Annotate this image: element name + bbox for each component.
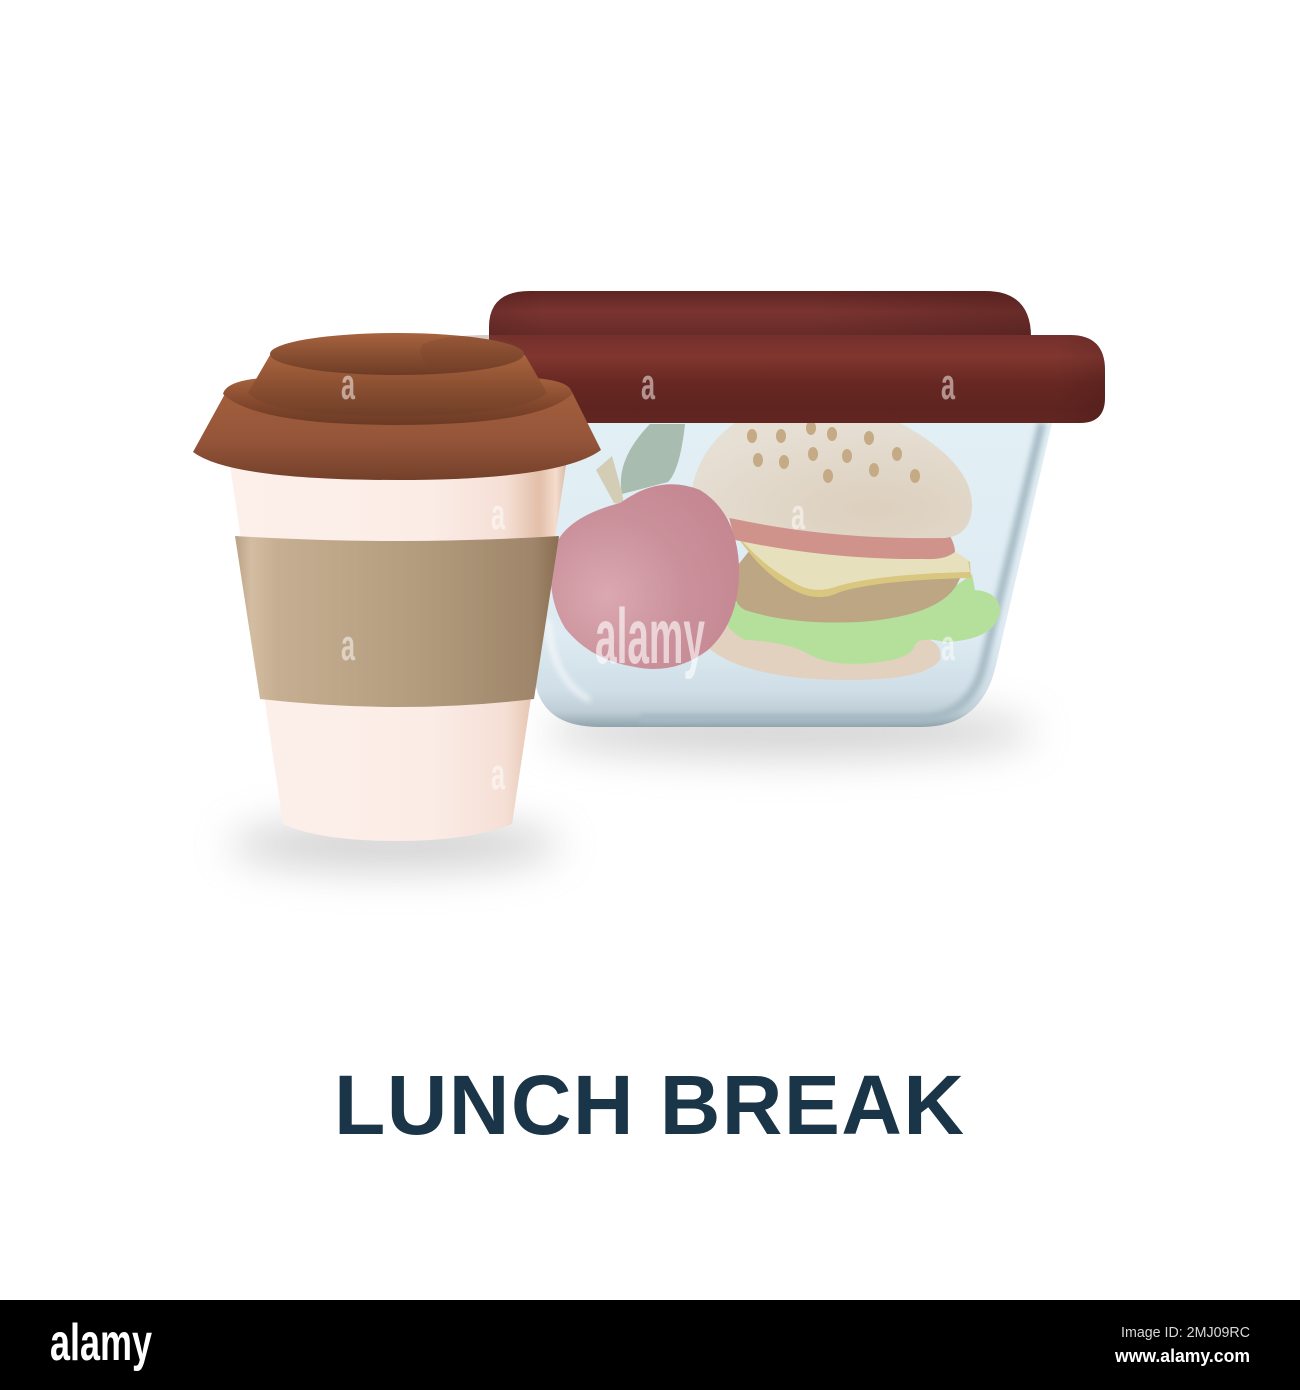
watermarks: a <box>491 750 505 799</box>
image id: Image ID: 2MJ09RC <box>1121 1324 1250 1341</box>
infographic canvas <box>0 291 1300 1390</box>
watermarks: a <box>941 360 955 409</box>
apple leaf <box>621 424 685 494</box>
cup sleeve <box>235 536 559 707</box>
watermarks: a <box>941 621 955 670</box>
watermarks: a <box>491 490 505 539</box>
website: www.alamy.com <box>1114 1346 1250 1366</box>
watermarks: a <box>791 490 805 539</box>
watermarks: alamy <box>595 592 705 680</box>
watermarks: a <box>641 360 655 409</box>
glass container <box>510 423 1052 727</box>
lid brim <box>193 392 601 480</box>
lid top ellipse <box>270 333 524 375</box>
cup body <box>230 465 566 841</box>
patty <box>733 550 961 622</box>
lid second ring <box>223 378 572 425</box>
title: LUNCH BREAK <box>334 1058 964 1152</box>
sandwich <box>690 421 1000 680</box>
lettuce <box>723 574 1000 664</box>
footer logo: alamy <box>50 1314 152 1372</box>
lid lower tier <box>489 335 1105 423</box>
cup shadow <box>230 819 560 871</box>
top bun <box>690 423 972 538</box>
apple stem <box>596 456 624 505</box>
lid middle tier <box>248 355 547 416</box>
box shadow <box>545 706 1035 758</box>
cheese <box>740 541 971 597</box>
lunch box <box>489 291 1105 758</box>
tomato <box>729 518 955 559</box>
apple <box>551 484 739 669</box>
lid upper tier <box>489 291 1031 337</box>
sesame seeds <box>747 421 920 483</box>
watermarks: a <box>341 621 355 670</box>
bottom bun <box>710 625 940 680</box>
watermarks <box>341 360 955 799</box>
footer bar <box>0 1300 1300 1390</box>
coffee cup <box>193 333 601 871</box>
watermarks: a <box>341 360 355 409</box>
